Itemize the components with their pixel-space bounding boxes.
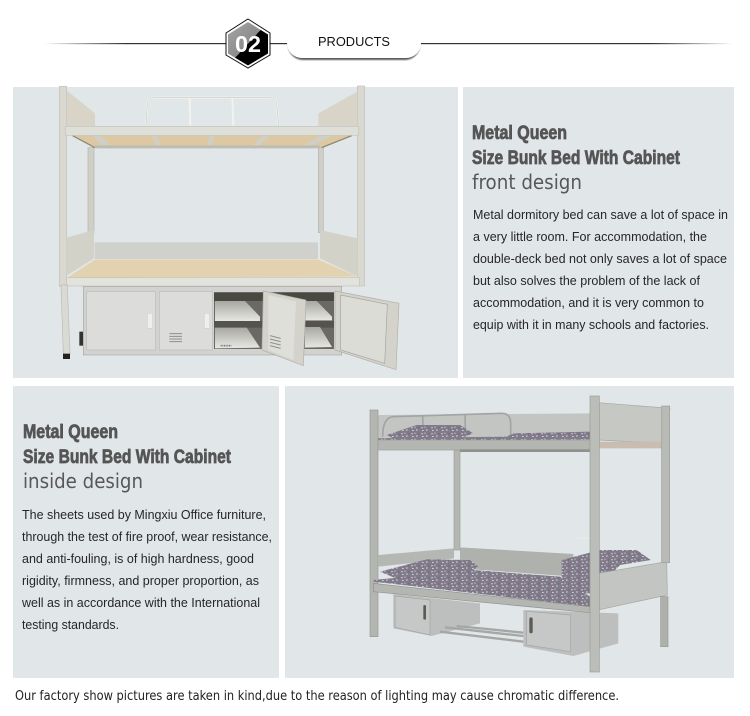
body text: inside design: The sheets used by Mingxiu Office furniture, <box>22 507 266 522</box>
body text: inside design: rigidity, firmness, and proper proportion, as <box>22 573 259 588</box>
heading pill: products: PRODUCTS <box>318 34 390 49</box>
subheading: inside design: inside design <box>23 469 143 493</box>
footer note: Our factory show pictures are taken in kind,due to the reason of lighting may cause chromatic difference. <box>15 689 619 704</box>
body text: inside design: through the test of fire proof, wear resistance, <box>22 529 272 544</box>
panel: inside design text <box>13 386 279 678</box>
body text: inside design <box>21 507 272 632</box>
panel: inside design photo <box>285 386 734 678</box>
heading: metal queen: Metal Queen <box>472 123 567 144</box>
subheading: front design: front design <box>472 170 582 194</box>
body text: front design <box>473 207 728 332</box>
header divider line <box>44 43 733 44</box>
body text: front design: a very little room. For accommodation, the <box>473 229 707 244</box>
body text: front design: double-deck bed not only saves a lot of space <box>473 251 727 266</box>
illustration: bunk bed with bedding <box>370 396 670 672</box>
panel: front design text <box>463 87 734 378</box>
body text: front design: but also solves the problem of the lack of <box>473 273 700 288</box>
icon: hexagon badge 02: 02 <box>235 31 261 57</box>
heading: size bunk bed with cabinet: Size Bunk Bed With Cabinet <box>23 447 232 468</box>
body text: front design: accommodation, and it is very common to <box>473 295 704 310</box>
icon: hexagon badge 02 <box>226 19 270 68</box>
body text: inside design: and anti-fouling, is of high hardness, good <box>22 551 254 566</box>
panel: front design photo <box>13 86 458 378</box>
heading: metal queen: Metal Queen <box>23 422 118 443</box>
body text: front design: Metal dormitory bed can save a lot of space in <box>473 207 728 222</box>
body text: inside design: well as in accordance with the International <box>21 595 260 610</box>
illustration: bunk bed front view <box>59 86 399 370</box>
body text: inside design: testing standards. <box>22 617 119 632</box>
body text: front design: equip with it in many schools and factories. <box>473 317 709 332</box>
heading pill: products <box>287 24 421 60</box>
heading: size bunk bed with cabinet: Size Bunk Bed With Cabinet <box>472 148 681 169</box>
